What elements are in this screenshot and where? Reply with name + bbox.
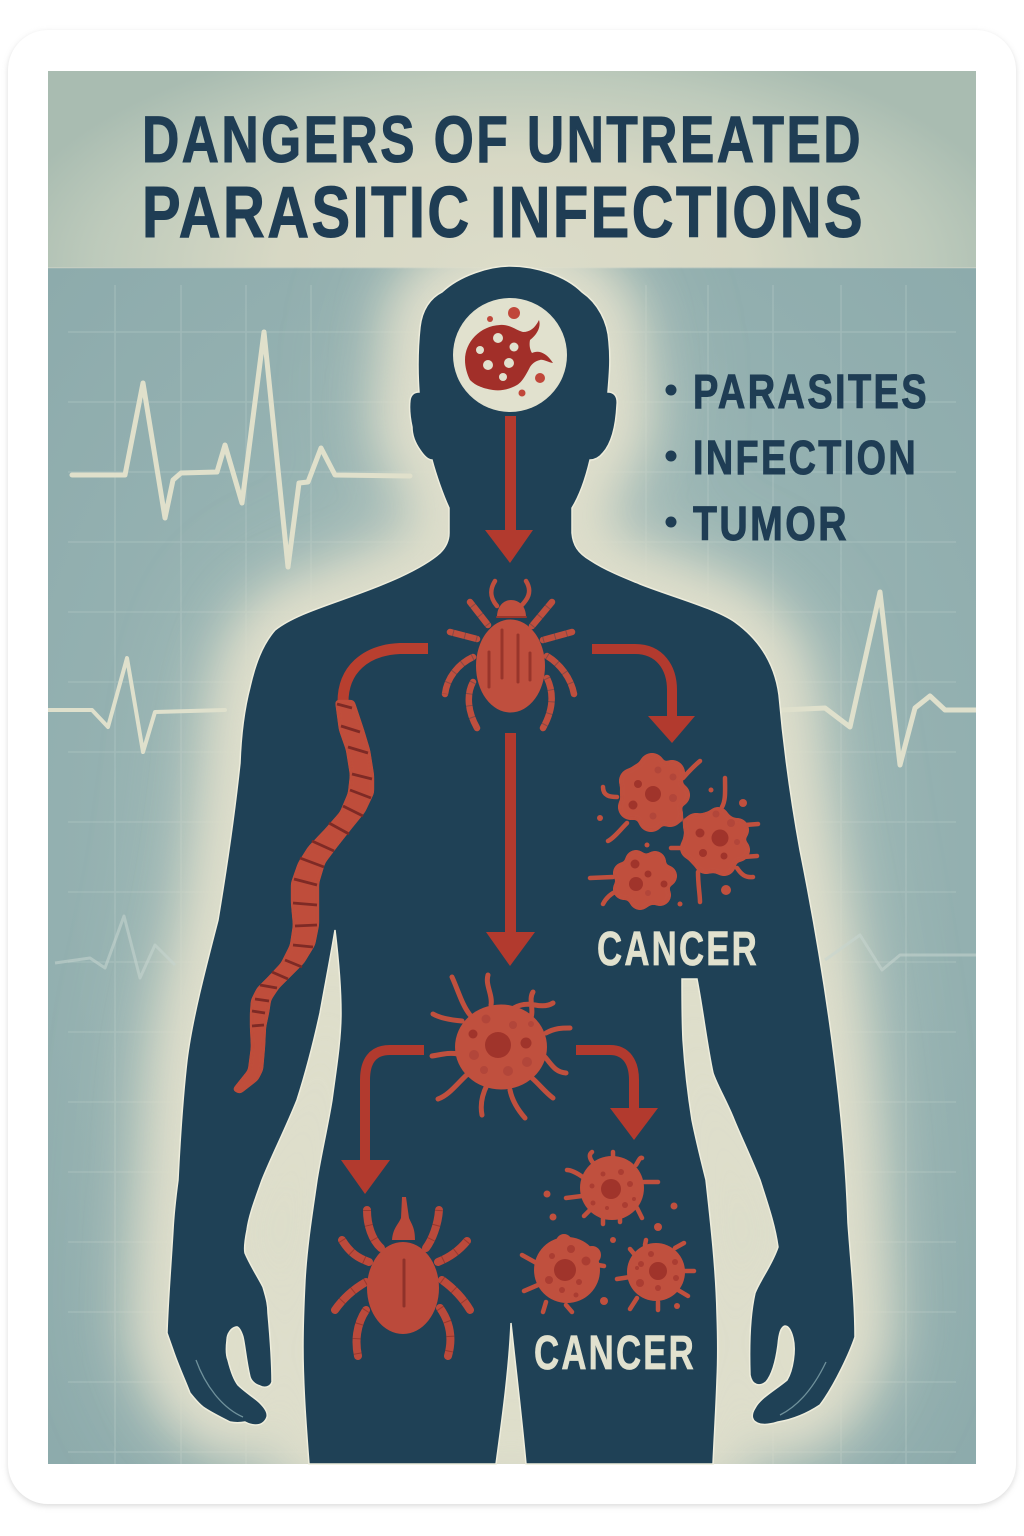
title: PARASITIC INFECTIONS [142,173,865,253]
ecg line: top left [72,332,410,567]
panel: header band [48,71,976,267]
label: upper cancer: CANCER [597,923,759,976]
ecg line: middle left [48,658,225,752]
icon: beetle parasite [445,581,574,728]
arrow: abdomen to tick [341,1050,424,1194]
icon: central tumor cell [432,975,570,1118]
bullet list: PARASITES [693,366,929,419]
icon: worm in arm [232,700,374,1094]
ecg line: faint lower right [825,935,976,970]
icon: upper tumor cluster [590,753,758,910]
icon: tick parasite [335,1197,470,1356]
arrow: chest to upper tumors [592,649,695,743]
bullet list: INFECTION [693,432,918,485]
icon: lower tumor cluster [522,1152,694,1312]
ecg line: middle right [782,592,976,765]
bullet list [666,366,929,551]
arrow: abdomen to lower tumors [576,1050,658,1140]
arrow: chest to worm [343,648,428,702]
bullet list: TUMOR [693,498,849,551]
icon: brain parasite circle [453,298,567,412]
human body silhouette [167,266,855,1464]
arrow: head to chest [485,416,533,563]
label: lower cancer: CANCER [534,1327,696,1380]
arrow: chest to abdomen [486,733,535,966]
ecg line: faint lower left [55,916,175,978]
panel: lower background [48,266,976,1464]
title [142,102,865,253]
